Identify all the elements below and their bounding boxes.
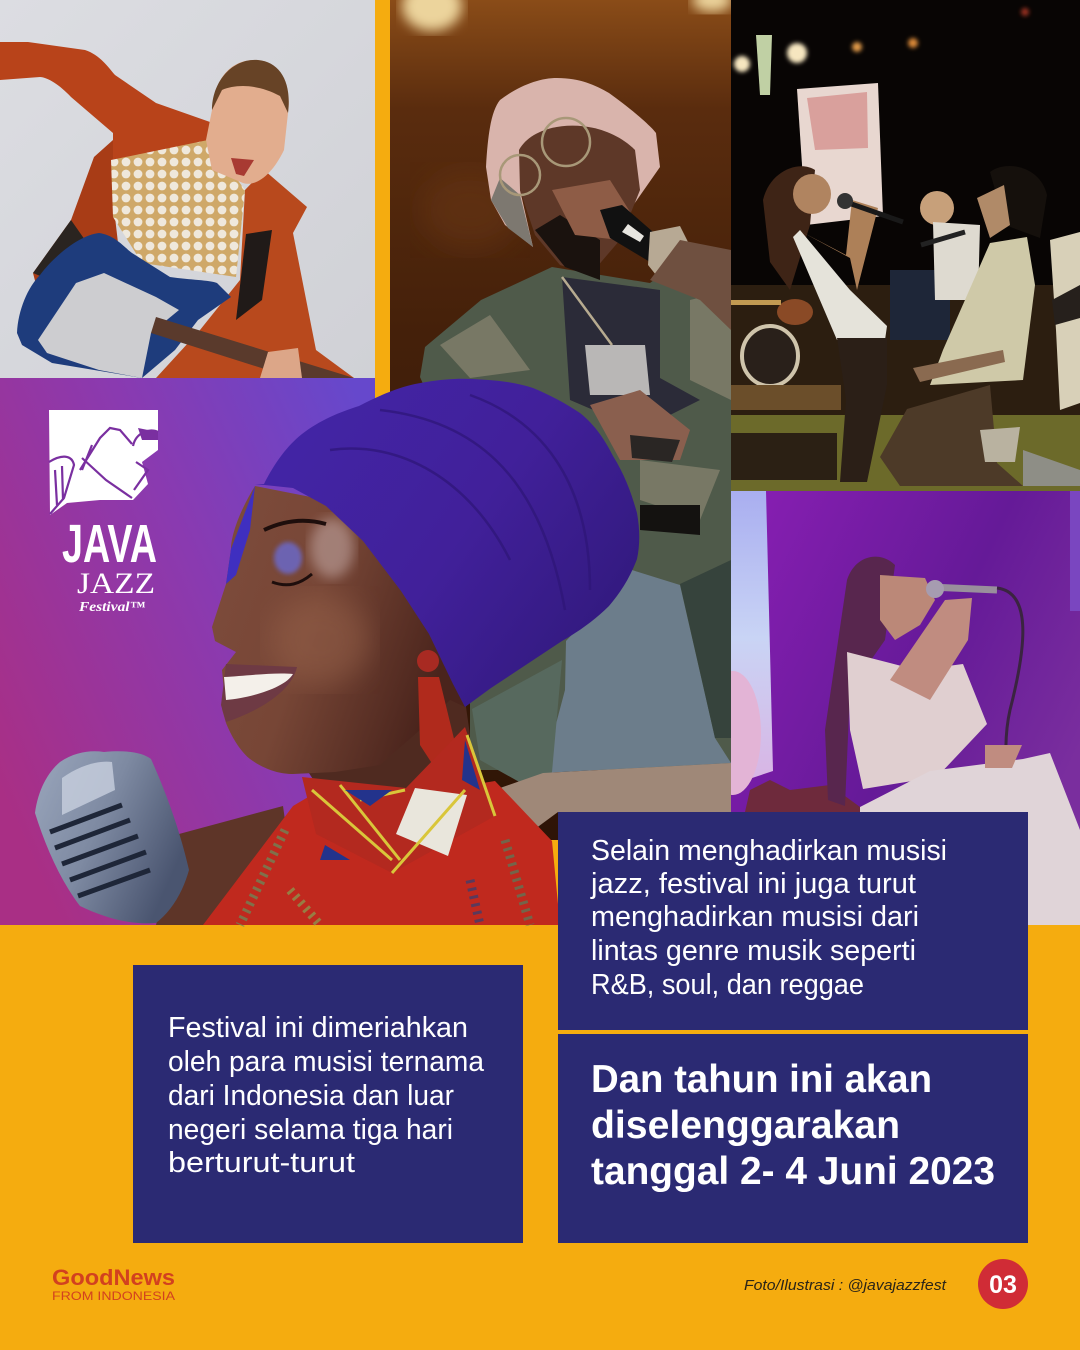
text box: cross-genre musicians: lintas genre musik seperti: [591, 935, 916, 967]
plaid trousers: [501, 763, 731, 826]
text box: festival description: [133, 965, 523, 1243]
photo: singer in bucket hat: [390, 0, 732, 840]
eyebrow: [264, 521, 326, 530]
drum kit: [742, 326, 798, 386]
bead dots: [240, 830, 530, 925]
right guitarist: [1050, 232, 1080, 410]
photo credit: Foto/Ilustrasi : @javajazzfest: [744, 1277, 947, 1294]
drummer: [920, 191, 954, 225]
neck: [307, 700, 470, 792]
t-shirt print: [585, 345, 650, 395]
hand over shirt: [590, 390, 690, 460]
logo wordmark JAZZ: JAZZ: [77, 567, 155, 600]
turban: [255, 379, 639, 707]
photo: guitarist in orange jacket: [0, 0, 375, 378]
microphone: [35, 751, 189, 923]
face: [212, 486, 465, 774]
shoulder: [156, 806, 300, 925]
gear on floor: [980, 427, 1020, 462]
brand: GoodNews From Indonesia: [52, 1265, 175, 1303]
singer right: [990, 166, 1047, 238]
hand and microphone: [552, 180, 632, 240]
photo: band on stage: [731, 0, 1080, 491]
text box: cross-genre musicians: R&B, soul, dan reggae: [591, 969, 864, 1001]
brand: GoodNews From Indonesia: FROM INDONESIA: [52, 1289, 175, 1303]
page number badge: 03: [989, 1271, 1017, 1299]
logo wordmark JAVA: JAVA: [62, 514, 157, 574]
closed eye: [272, 574, 312, 585]
text box: festival description: oleh para musisi ternama: [168, 1046, 485, 1078]
blue light on face edge: [226, 486, 255, 584]
singer foreground: woman in purple turban: [35, 379, 639, 925]
text box: cross-genre musicians: Selain menghadirkan musisi: [591, 835, 947, 867]
jacket: [420, 250, 731, 770]
photo: woman singing on purple stage: [705, 491, 1080, 925]
text box: event date: Dan tahun ini akan: [591, 1058, 932, 1101]
logo artwork: saxophonist: [49, 410, 158, 515]
text box: event date: [558, 1034, 1028, 1243]
face and beard: [519, 126, 640, 275]
page number badge: [978, 1259, 1028, 1309]
purple panel: [0, 378, 375, 925]
text box: festival description: negeri selama tiga hari: [168, 1114, 453, 1146]
text box: event date: diselenggarakan: [591, 1104, 900, 1147]
text box: festival description: Festival ini dimeriahkan: [168, 1012, 468, 1044]
grey tee: [543, 570, 731, 773]
singer left: [763, 166, 815, 290]
text box: festival description: berturut-turut: [168, 1147, 355, 1179]
earring: [417, 650, 465, 788]
red beaded fringe: [203, 781, 560, 925]
brand: GoodNews From Indonesia: GoodNews: [52, 1265, 175, 1290]
beaded choker: [302, 727, 495, 873]
eyeshadow: [274, 542, 302, 574]
logo: Java Jazz Festival: [49, 410, 158, 615]
text box: cross-genre musicians: jazz, festival ini juga turut: [590, 868, 916, 900]
hat: [486, 78, 660, 247]
text box: festival description: dari Indonesia dan luar: [168, 1080, 454, 1112]
logo wordmark Festival: Festival™: [78, 600, 145, 615]
lit floor: [731, 415, 1080, 491]
text box: cross-genre musicians: [558, 812, 1028, 1030]
text box: event date: tanggal 2- 4 Juni 2023: [591, 1150, 995, 1193]
smile: [221, 664, 297, 722]
text box: cross-genre musicians: menghadirkan musisi dari: [591, 901, 919, 933]
cheek and brow highlight: [310, 518, 354, 578]
